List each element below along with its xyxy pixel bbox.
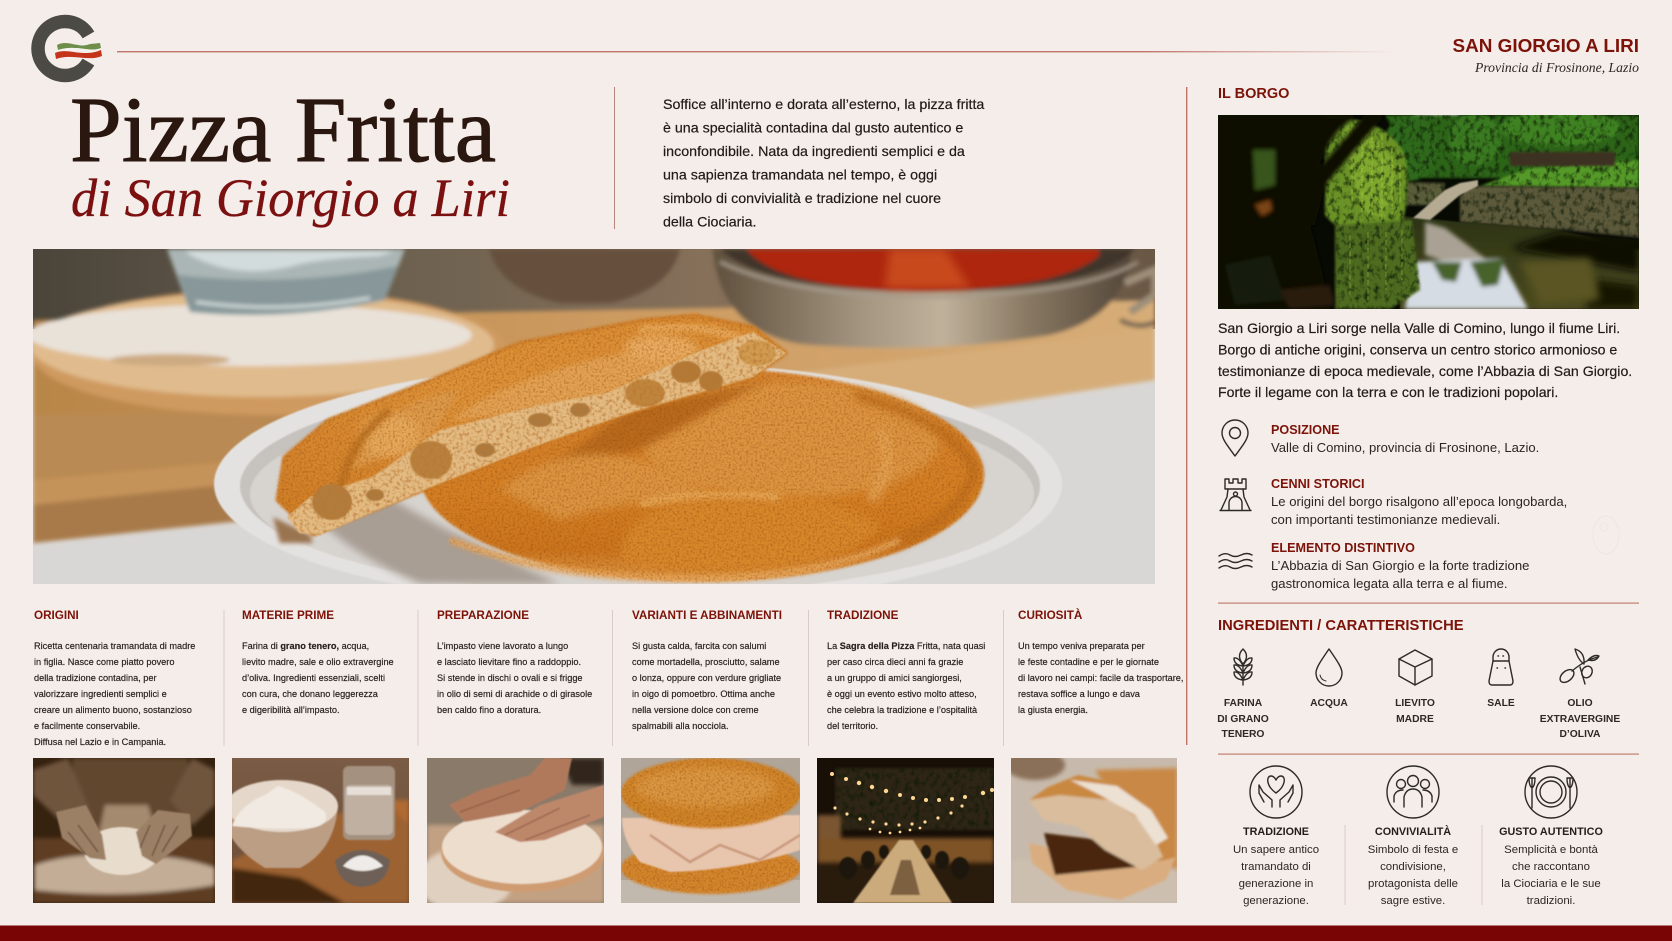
borgo description: testimonianze di epoca medievale, come l’Abbazia di San Giorgio.: [1218, 363, 1632, 379]
willow and reflection: [1325, 118, 1420, 309]
ingredient: farina: DI GRANO: [1217, 714, 1269, 725]
title: Pizza Fritta: Pizza Fritta: [70, 79, 496, 182]
icon: olive branch: [1558, 649, 1599, 685]
info row: elemento distintivo: L’Abbazia di San Giorgio e la forte tradizione: [1271, 558, 1529, 573]
icon: hands holding heart: [1250, 766, 1302, 818]
steps: [1413, 180, 1478, 220]
location name: SAN GIORGIO A LIRI: [1453, 36, 1639, 57]
value: tradizione: Un sapere antico: [1233, 844, 1319, 856]
column: varianti e abbinamenti: in oigo di pomoetbro. Ottima anche: [632, 689, 775, 699]
info row: elemento distintivo: [0, 0, 1533, 591]
wooden board: [33, 300, 1155, 543]
ingredient: farina: TENERO: [1222, 729, 1264, 740]
value: tradizione: generazione in: [1239, 878, 1313, 890]
icon: map pin: [1222, 420, 1248, 456]
column: origini: valorizzare ingredienti semplici e: [34, 689, 167, 699]
upper cut pizza half: [277, 315, 786, 535]
ingredient: lievito madre: LIEVITO: [1395, 698, 1435, 709]
column: origini: ORIGINI: [34, 609, 79, 622]
value: tradizione: TRADIZIONE: [1243, 826, 1309, 838]
right divider: [1218, 754, 1639, 755]
column: tradizione: per caso circa dieci anni fa grazie: [827, 657, 963, 667]
column: origini: Diffusa nel Lazio e in Campania.: [34, 737, 166, 747]
far trees and lawn: [1383, 110, 1639, 188]
string lights: [830, 772, 994, 834]
ingredient: olio: OLIO: [1567, 698, 1593, 709]
value: tradizione: tramandato di: [1241, 861, 1311, 873]
saucepan: [713, 249, 1155, 348]
column: tradizione: TRADIZIONE: [827, 609, 899, 622]
cut crumb with air holes: [287, 332, 786, 535]
photo: filled pizza fritta: [621, 758, 801, 903]
intro text: simbolo di convivialità e tradizione nel cuore: [663, 191, 941, 207]
faint watermark: [1593, 516, 1619, 554]
column: origini: della tradizione contadina, per: [34, 673, 157, 683]
column: preparazione: L’impasto viene lavorato a lungo: [437, 641, 568, 651]
column: origini: e facilmente conservabile.: [34, 721, 140, 731]
column: varianti e abbinamenti: [0, 0, 784, 731]
value: convivialita: sagre estive.: [1381, 895, 1445, 907]
hero photo: pizza fritta on plate: [28, 249, 1155, 606]
glass of water: [167, 249, 405, 315]
column: preparazione: PREPARAZIONE: [437, 609, 529, 622]
crowd: [839, 845, 969, 879]
column: curiosita: le feste contadine e per le giornate: [1018, 657, 1159, 667]
photo: flour, water and salt: [225, 758, 409, 903]
footer band: [0, 926, 1672, 941]
icon: castle tower: [1220, 479, 1251, 510]
ingredient: sale: [1487, 649, 1515, 709]
white plate: [213, 367, 1062, 584]
vertical divider: [614, 87, 615, 229]
column: preparazione: [0, 0, 595, 715]
column: curiosita: Un tempo veniva preparata per: [1018, 641, 1145, 651]
info row: posizione: POSIZIONE: [1271, 423, 1340, 437]
column: tradizione: a un gruppo di amici sangiorgesi,: [827, 673, 962, 683]
column: tradizione: La Sagra della Pizza Fritta, nata quasi: [827, 641, 985, 651]
intro text: una sapienza tramandata nel tempo, è oggi: [663, 168, 937, 184]
column: curiosita: [0, 0, 1186, 715]
column: materie prime: con cura, che donano leggerezza: [242, 689, 379, 699]
info row: posizione: [1222, 420, 1539, 456]
column: preparazione: ben caldo fino a doratura.: [437, 705, 541, 715]
icon: wheat: [1234, 649, 1252, 685]
header rule: [117, 51, 1397, 52]
heading: ingredienti: INGREDIENTI / CARATTERISTICHE: [1218, 618, 1464, 634]
value: tradizione: [1233, 766, 1319, 907]
value: convivialita: Simbolo di festa e: [1368, 844, 1458, 856]
value: gusto autentico: [1499, 766, 1603, 907]
column: varianti e abbinamenti: come mortadella, prosciutto, salame: [632, 657, 780, 667]
borgo description: Borgo di antiche origini, conserva un centro storico armonioso e: [1218, 342, 1617, 358]
ingredient: lievito madre: [1395, 650, 1435, 725]
column: origini: [0, 0, 198, 747]
photo: river at san giorgio: [1218, 110, 1639, 309]
column: materie prime: d’oliva. Ingredienti essenziali, scelti: [242, 673, 385, 683]
logo: [38, 22, 102, 76]
photo: sagra evening festival: [817, 758, 994, 903]
ingredient: farina: FARINA: [1224, 698, 1263, 709]
column: varianti e abbinamenti: VARIANTI E ABBINAMENTI: [632, 609, 782, 622]
floured dough disc: [28, 289, 507, 415]
column: materie prime: [0, 0, 396, 715]
column: tradizione: del territorio.: [827, 721, 878, 731]
column: varianti e abbinamenti: nella versione dolce con creme: [632, 705, 759, 715]
willow strands: [1350, 125, 1402, 300]
intro text: Soffice all’interno e dorata all’esterno, la pizza fritta: [663, 97, 984, 113]
value: convivialita: condivisione,: [1380, 861, 1446, 873]
distant sky gap: [1412, 115, 1464, 117]
icon: river waves: [1219, 554, 1252, 568]
borgo description: Forte il legame con la terra e con le tradizioni popolari.: [1218, 384, 1558, 400]
column: curiosita: restava soffice a lungo e dava: [1018, 689, 1141, 699]
intro text: inconfondibile. Nata da ingredienti semplici e da: [663, 144, 965, 160]
ingredient: farina: [1217, 649, 1269, 740]
subtitle: di San Giorgio a Liri: di San Giorgio a Liri: [71, 168, 510, 228]
value: gusto autentico: GUSTO AUTENTICO: [1499, 826, 1603, 838]
value: tradizione: generazione.: [1243, 895, 1309, 907]
column: curiosita: la giusta energia.: [1018, 705, 1088, 715]
value: convivialita: protagonista delle: [1368, 878, 1458, 890]
column: preparazione: in olio di semi di arachide o di girasole: [437, 689, 592, 699]
reflection: [1405, 222, 1528, 309]
intro text: della Ciociaria.: [663, 214, 756, 230]
info row: cenni storici: [0, 0, 1571, 527]
ingredient: lievito madre: MADRE: [1396, 714, 1434, 725]
icon: three people: [1387, 766, 1439, 818]
column: materie prime: lievito madre, sale e olio extravergine: [242, 657, 394, 667]
icon: water drop: [1316, 649, 1342, 686]
right divider: [1218, 602, 1639, 604]
info row: cenni storici: con importanti testimonianze medievali.: [1271, 512, 1500, 527]
info row: elemento distintivo: gastronomica legata alla terra e al fiume.: [1271, 576, 1508, 591]
heading: il borgo: IL BORGO: [1218, 86, 1289, 102]
brown bowl: [489, 249, 680, 303]
column: tradizione: è oggi un evento estivo molto atteso,: [827, 689, 977, 699]
column: materie prime: MATERIE PRIME: [242, 609, 334, 622]
ingredient: acqua: [1310, 649, 1348, 709]
lower whole pizza: [420, 368, 984, 582]
column: materie prime: e digeribilità all’impasto.: [242, 705, 340, 715]
column: curiosita: di lavoro nei campi: facile da trasportare,: [1018, 673, 1183, 683]
ingredient: acqua: ACQUA: [1310, 698, 1348, 709]
borgo description: San Giorgio a Liri sorge nella Valle di Comino, lungo il fiume Liri.: [1218, 320, 1620, 336]
column: varianti e abbinamenti: spalmabili alla nocciola.: [632, 721, 729, 731]
ingredient: olio: EXTRAVERGINE: [1540, 714, 1620, 725]
info row: elemento distintivo: ELEMENTO DISTINTIVO: [1271, 541, 1415, 555]
ingredient: olio: D’OLIVA: [1560, 729, 1601, 740]
icon: plate and cutlery: [1525, 766, 1577, 818]
column: curiosita: CURIOSITÀ: [1018, 609, 1083, 622]
photo: hands kneading dough: [33, 758, 215, 903]
value: convivialita: [1368, 766, 1458, 907]
ingredient: sale: SALE: [1487, 698, 1515, 709]
value: gusto autentico: che raccontano: [1512, 861, 1590, 873]
column: varianti e abbinamenti: o lonza, oppure con verdure grigliate: [632, 673, 781, 683]
icon: salt shaker: [1489, 649, 1513, 685]
value: gusto autentico: tradizioni.: [1527, 895, 1575, 907]
column: tradizione: che celebra la tradizione e l’ospitalità: [827, 705, 978, 715]
info row: cenni storici: CENNI STORICI: [1271, 477, 1365, 491]
column: origini: in figlia. Nasce come piatto povero: [34, 657, 174, 667]
column: origini: creare un alimento buono, sostanzioso: [34, 705, 192, 715]
icon: yeast cube: [1399, 650, 1432, 685]
value: gusto autentico: Semplicità e bontà: [1504, 844, 1599, 856]
dark left trees: [1218, 115, 1385, 309]
ingredient: olio: [1540, 649, 1620, 740]
photo: sweet pizza with chocolate: [1005, 750, 1177, 903]
column: preparazione: Si stende in dischi o ovali e si frigge: [437, 673, 583, 683]
stone wall: [1396, 182, 1639, 238]
water: [1400, 216, 1639, 309]
value: convivialita: CONVIVIALITÀ: [1375, 825, 1451, 838]
column: tradizione: [0, 0, 988, 731]
column: preparazione: e lasciato lievitare fino a raddoppio.: [437, 657, 581, 667]
photo: hands stretching dough: [427, 758, 604, 903]
info row: posizione: Valle di Comino, provincia di Frosinone, Lazio.: [1271, 440, 1539, 455]
column: materie prime: Farina di grano tenero, acqua,: [242, 641, 369, 651]
location subtitle: Provincia di Frosinone, Lazio: [1474, 60, 1639, 75]
intro text: è una specialità contadina dal gusto autentico e: [663, 120, 963, 136]
info row: cenni storici: Le origini del borgo risalgono all’epoca longobarda,: [1271, 494, 1567, 509]
value: gusto autentico: la Ciociaria e le sue: [1501, 878, 1601, 890]
column: origini: Ricetta centenaria tramandata di madre: [34, 641, 195, 651]
red vertical rule: [1186, 87, 1187, 745]
column: varianti e abbinamenti: Si gusta calda, farcita con salumi: [632, 641, 766, 651]
